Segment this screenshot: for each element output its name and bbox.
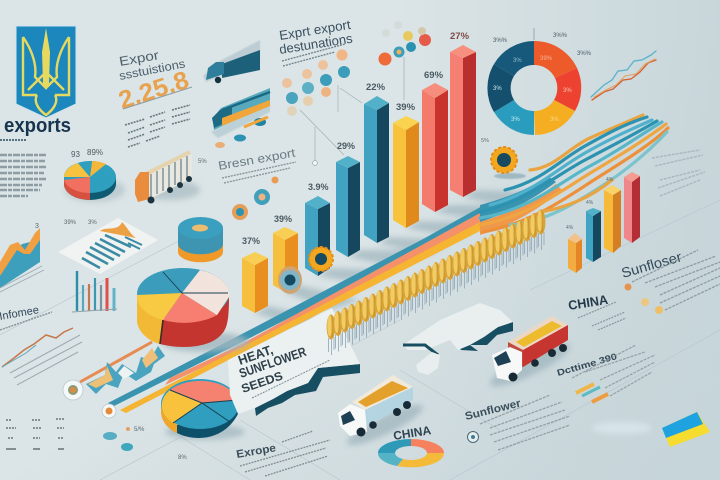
chart: donut: 3% [550,117,559,123]
chart: small right 3D bars: 4% [566,225,574,231]
icon: container truck: 5% [198,159,207,165]
heading: export statistics with big number: ssstuistions [118,56,186,83]
panel: Sunfloser right text block: Sunfloser [619,248,684,281]
panel: Bresn export [217,145,297,220]
chart: small right 3D bars [566,172,640,273]
bar: 37% yellow [242,236,268,313]
bar: 39% yellow: 39% [274,214,292,224]
chart: large pie [137,268,249,352]
icon: ring medallion [278,266,302,294]
chart: left area line: 3 [35,223,39,230]
chart: upper right line [591,51,656,100]
bar: 27% coral: 27% [450,31,470,42]
bar: 22% teal: 22% [366,82,386,93]
panel: Sunflower center text block [464,395,570,450]
chart: donut: 3%% [553,33,568,39]
icon: sunflower upper: 5% [481,138,489,144]
small stats bottom left [6,419,187,461]
icon: train [211,88,270,148]
heading: export destinations [278,17,354,66]
bar: 39% yellow tall [393,102,419,228]
emblem: Ukrainian trident shield [16,26,76,118]
bar: pink [624,172,640,243]
map: left white region with Wheat, Sunflower seeds label: SUNFLOWER [237,344,309,381]
small stats bottom left: 5/% [134,427,145,433]
bar: teal [586,208,601,262]
heading: exports: exports [4,115,71,137]
bar: 29% teal: 29% [337,141,355,151]
bar: 69% coral [422,70,448,212]
icons: destination dots [282,50,404,165]
bar: 22% teal [364,82,389,243]
flag: Ukraine [662,412,710,447]
chart: lower pie [161,379,245,440]
panel: Exrope text block: Exrope [235,442,277,461]
chart: small right 3D bars: 4% [586,200,594,206]
pie chart: small top left: 93 [71,150,80,159]
soft highlight spot [592,422,652,434]
panel: Bresn export: Bresn export [217,145,297,173]
icon: sunflower upper [481,138,526,179]
heading: export destinations: destunations [278,30,354,57]
map: left white region with Wheat, Sunflower seeds label: SEEDS [239,369,285,396]
chart: small bottom donut [378,439,444,467]
heading: export destinations: Exprt export [278,17,352,43]
map: left white region with Wheat, Sunflower seeds label [228,308,360,416]
bar: 69% coral: 69% [424,70,444,81]
chart: left area line: 39% [64,220,77,226]
panel: Exrope text block [235,431,330,476]
panel: Sunflower center text block: Sunflower [464,397,523,423]
text block: upper left description [0,140,47,196]
wheat row [327,210,545,355]
heading: CHINA center: CHINA [392,423,432,443]
bar: 39% teal [305,182,330,276]
bar: yellow [604,185,621,253]
chart: left area line: 3% [88,220,97,226]
pie chart: small top left: 89% [87,148,103,157]
chart: donut: 3% [513,58,522,64]
panel: CHINA right text block: CHINA [567,292,610,313]
map: right white region [403,303,513,375]
chart: donut [487,28,592,135]
icons: top small circles [378,21,431,66]
chart: thin vertical bars [72,271,117,312]
heading: export statistics with big number: Expor [118,47,161,69]
chart: donut: 3%% [493,38,508,44]
band: diagonal export ribbon [102,176,562,418]
chart: small right 3D bars: 4% [606,177,614,183]
icon: stacked cylinder [178,217,223,262]
chart: main rising 3D bars [242,31,476,313]
chart: left thin line [0,312,82,385]
bar: 39% yellow tall: 39% [396,102,416,113]
ribbons: wavy streams to the right [480,115,668,232]
icon: container truck [135,152,207,204]
heading: export statistics with big number [115,47,192,147]
bar: 27% coral [450,31,476,197]
panel: Dcttime 390 text block [556,345,655,402]
chart: donut: 3% [493,86,502,92]
icon: sunflower lower [309,247,333,271]
truck: white truck with grain [338,375,427,452]
bar shadows [255,190,540,330]
bar: 39% teal: 3.9% [308,182,329,192]
bar: 39% yellow [273,214,298,292]
pie chart: small top left [64,148,125,202]
chart: zigzag mountain and arrow [63,342,165,400]
panel: Sunfloser right text block [619,248,720,314]
bar: 37% yellow: 37% [242,236,260,246]
panel: Dcttime 390 text block: Dcttime 390 [556,351,618,378]
truck: red truck with grain [486,316,574,393]
card: horizontal bar chart [58,218,158,274]
chart: donut: 3% [563,88,572,94]
chart: left area line [0,220,97,292]
bar: 29% teal [336,141,360,257]
panel: CHINA right text block [567,292,626,330]
chart: donut: 39% [540,56,553,62]
small stats bottom left: 8% [178,455,187,461]
map: left white region with Wheat, Sunflower seeds label: HEAT, [236,342,275,368]
bar: orange [568,233,582,273]
icon: navy truck [203,40,260,83]
chart: donut: 3% [511,117,520,123]
chart: donut: 3%% [577,51,592,57]
heading: export statistics with big number: 2.25.8 [115,66,192,115]
text block: right side faded [652,150,705,196]
